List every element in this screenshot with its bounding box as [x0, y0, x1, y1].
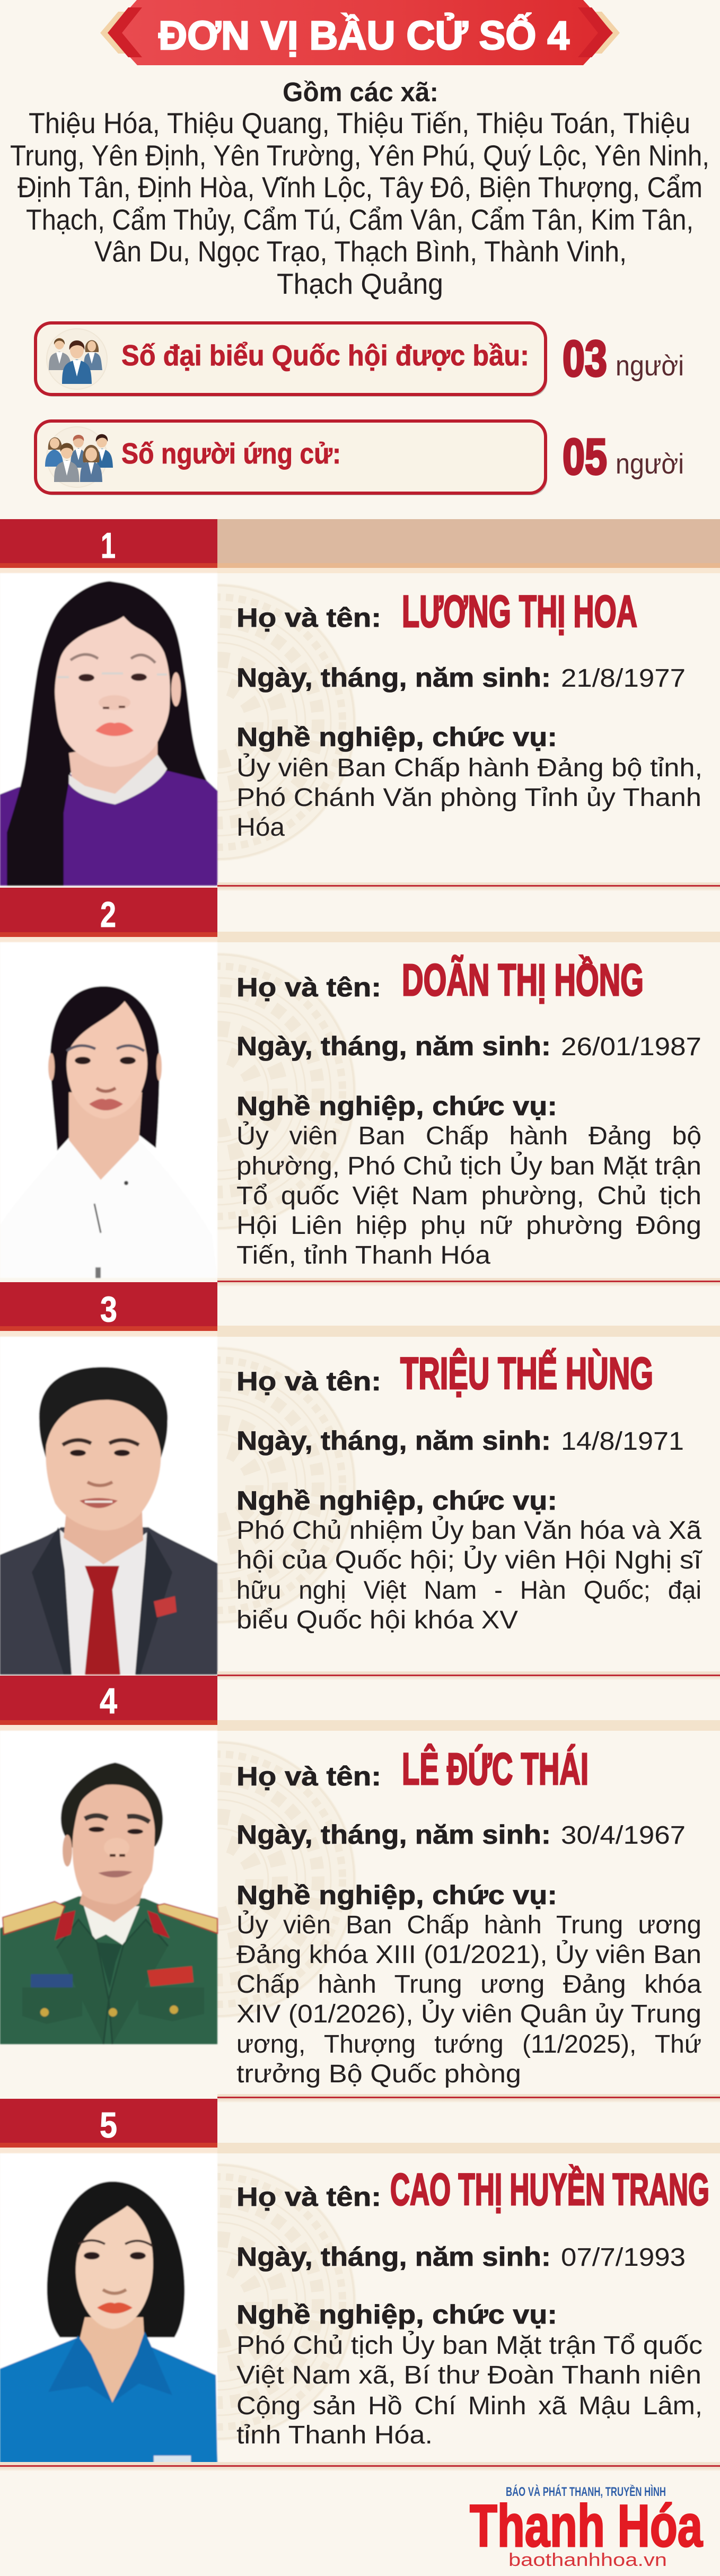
candidate 1 panel: 21/8/1977 [561, 664, 686, 693]
label: Số đại biểu Quốc hội được bầu: [121, 339, 529, 372]
candidate 1 panel: Hóa [236, 813, 285, 842]
title banner [100, 0, 620, 65]
subheading: Gồm các xã: [283, 77, 438, 107]
value: 03 người: người [616, 350, 684, 382]
list of communes [10, 77, 709, 300]
separator 4 [217, 2094, 720, 2102]
birth date 2: Ngày, tháng, năm sinh: [236, 1031, 551, 1061]
list of communes: Thạch Quảng [277, 267, 443, 300]
portrait 4 [0, 1731, 217, 2044]
candidate 2 panel [0, 888, 720, 1278]
drum watermark [217, 952, 356, 1230]
number bar 3 [0, 1282, 720, 1337]
candidate 5 panel: tỉnh Thanh Hóa. [236, 2421, 433, 2449]
name 4: Họ và tên: [236, 1762, 381, 1791]
number bar 3: 3 [100, 1289, 117, 1329]
drum watermark [217, 1347, 356, 1624]
candidate 3 panel: 14/8/1971 [561, 1427, 684, 1456]
separator 5 [0, 2462, 720, 2471]
list of communes: Vân Du, Ngọc Trạo, Thạch Bình, Thành Vinh, [94, 235, 627, 268]
drum watermark [217, 2163, 356, 2440]
candidate 2 panel: Hội Liên hiệp phụ nữ phường Đông [236, 1212, 701, 1240]
birth date 3: Ngày, tháng, năm sinh: [236, 1426, 551, 1456]
separator 3 [217, 1671, 720, 1680]
candidate 3 panel: hội của Quốc hội; Ủy viên Hội Nghị sĩ [236, 1545, 703, 1574]
number bar 2 [0, 888, 720, 942]
candidate 2 panel: Tiến, tỉnh Thanh Hóa [236, 1241, 490, 1269]
candidate 2 panel: Tổ quốc Việt Nam phường, Chủ tịch [236, 1182, 701, 1210]
icon: three people [47, 329, 107, 389]
candidate 4 panel: Chấp hành Trung ương Đảng khóa [236, 1970, 701, 1999]
candidate 5 panel: 07/7/1993 [561, 2244, 686, 2272]
birth date 1: Ngày, tháng, năm sinh: [236, 663, 551, 693]
candidate 4 panel: LÊ ĐỨC THÁI [402, 1744, 589, 1794]
candidate 4 panel: XIV (01/2026), Ủy viên Quân ủy Trung [236, 1999, 701, 2028]
candidate 3 panel: Phó Chủ nhiệm Ủy ban Văn hóa và Xã [236, 1515, 701, 1545]
portrait 2 [0, 942, 217, 1278]
number bar 5: 5 [100, 2105, 117, 2145]
icon: five people [45, 427, 113, 487]
value: 03 người: 03 [563, 330, 607, 387]
separator 1 [217, 882, 720, 891]
name 2: Họ và tên: [236, 972, 381, 1002]
candidate 5 panel [0, 2099, 720, 2466]
candidate 4 panel: Ủy viên Ban Chấp hành Trung ương [236, 1910, 701, 1939]
number bar 1 [0, 519, 720, 573]
value: 05 người: người [616, 448, 684, 480]
drum watermark [217, 1740, 356, 2018]
stat box: delegates to elect [36, 323, 547, 397]
stat box: candidates [36, 421, 547, 495]
occupation 5: Nghề nghiệp, chức vụ: [236, 2300, 557, 2329]
value: 03 người [563, 330, 684, 387]
label: Số người ứng cử: [121, 437, 341, 470]
birth date 4: Ngày, tháng, năm sinh: [236, 1820, 551, 1850]
candidate 4 panel: Đảng khóa XIII (01/2021), Ủy viên Ban [236, 1940, 701, 1969]
name 1: Họ và tên: [236, 603, 381, 633]
separator 2 [217, 1278, 720, 1286]
candidate 1 panel [0, 519, 720, 886]
name 3: Họ và tên: [236, 1366, 381, 1396]
candidate 4 panel: trưởng Bộ Quốc phòng [236, 2060, 521, 2088]
portrait 5 [0, 2153, 217, 2466]
occupation 1: Nghề nghiệp, chức vụ: [236, 722, 557, 752]
candidate 2 panel: Ủy viên Ban Chấp hành Đảng bộ [236, 1121, 701, 1150]
candidate 5 panel: Việt Nam xã, Bí thư Đoàn Thanh niên [236, 2361, 701, 2389]
number bar 2: 2 [100, 895, 116, 935]
candidate 2 panel: 26/01/1987 [561, 1033, 701, 1061]
candidate 4 panel: 30/4/1967 [561, 1821, 686, 1850]
number bar 1: 1 [101, 525, 116, 566]
candidate 2 panel: phường, Phó Chủ tịch Ủy ban Mặt trận [236, 1151, 701, 1180]
candidate 1 panel: Ủy viên Ban Chấp hành Đảng bộ tỉnh, [236, 753, 703, 782]
candidate 3 panel: biểu Quốc hội khóa XV [236, 1606, 518, 1634]
candidate 3 panel: hữu nghị Việt Nam - Hàn Quốc; đại [236, 1576, 701, 1605]
candidate 3 panel [0, 1282, 720, 1675]
number bar 5 [0, 2099, 720, 2153]
drum watermark [217, 583, 356, 861]
number bar 4 [0, 1676, 720, 1731]
value: 05 người: 05 [563, 428, 607, 485]
occupation 2: Nghề nghiệp, chức vụ: [236, 1091, 557, 1121]
portrait 1 [0, 573, 217, 886]
birth date 5: Ngày, tháng, năm sinh: [236, 2242, 551, 2272]
value: 05 người [563, 428, 684, 485]
candidate 5 panel: Cộng sản Hồ Chí Minh xã Mậu Lâm, [236, 2392, 703, 2420]
title text: ĐƠN VỊ BẦU CỬ SỐ 4 [159, 13, 569, 58]
name 5: Họ và tên: [236, 2182, 381, 2212]
candidate 4 panel [0, 1676, 720, 2088]
portrait 3 [0, 1337, 217, 1675]
logo: Báo và Phát thanh, truyền hình Thanh Hóa: baothanhhoa.vn [508, 2550, 667, 2570]
occupation 3: Nghề nghiệp, chức vụ: [236, 1486, 557, 1515]
candidate 5 panel: Phó Chủ tịch Ủy ban Mặt trận Tổ quốc [236, 2330, 703, 2360]
occupation 4: Nghề nghiệp, chức vụ: [236, 1880, 557, 1910]
candidate 4 panel: ương, Thượng tướng (11/2025), Thứ [236, 2030, 701, 2058]
candidate 1 panel: Phó Chánh Văn phòng Tỉnh ủy Thanh [236, 784, 701, 812]
number bar 4: 4 [100, 1681, 117, 1721]
